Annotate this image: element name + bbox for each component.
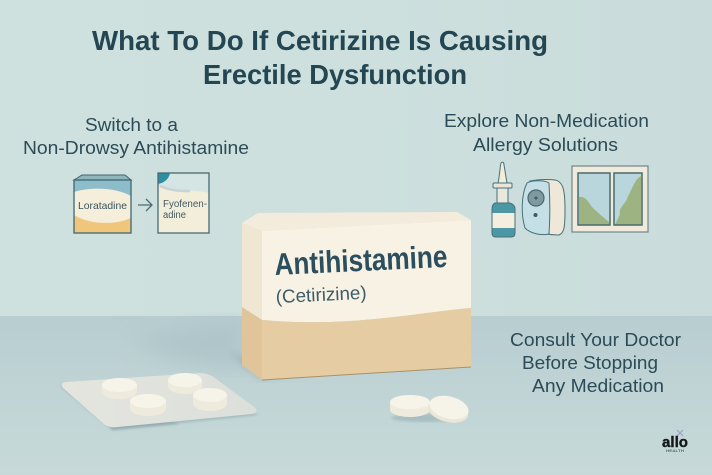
heading: switch to a non-drowsy antihistamine: Non-Drowsy Antihistamine bbox=[23, 137, 249, 158]
heading: explore non-medication allergy solutions: Allergy Solutions bbox=[473, 134, 618, 155]
box label: antihistamine: Antihistamine bbox=[274, 239, 448, 282]
title bbox=[92, 25, 548, 90]
logo: allo health: allo bbox=[662, 435, 688, 451]
antihistamine box bbox=[230, 212, 471, 380]
icon: fexofenadine box: adine bbox=[163, 210, 186, 221]
blister pack with tablets bbox=[60, 373, 258, 430]
tablet 1 bbox=[102, 378, 137, 399]
loose tablets bbox=[390, 392, 471, 427]
heading: switch to a non-drowsy antihistamine: Switch to a bbox=[85, 114, 179, 135]
heading: explore non-medication allergy solutions: Explore Non-Medication bbox=[444, 110, 649, 131]
logo: allo health: HEALTH bbox=[666, 449, 685, 453]
logo: allo health bbox=[662, 430, 688, 453]
box label: cetirizine: (Cetirizine) bbox=[275, 282, 367, 307]
heading: explore non-medication allergy solutions bbox=[444, 110, 649, 155]
heading: switch to a non-drowsy antihistamine bbox=[23, 114, 249, 158]
icon: window bbox=[572, 166, 648, 232]
tablet 2 bbox=[168, 373, 202, 394]
title: Erectile Dysfunction bbox=[203, 59, 467, 90]
icon: nasal spray bbox=[492, 162, 515, 237]
heading: consult your doctor: Consult Your Doctor bbox=[510, 329, 681, 350]
heading: consult your doctor: Any Medication bbox=[532, 375, 664, 396]
icon: loratadine box bbox=[74, 175, 131, 233]
tablet 3 bbox=[130, 394, 166, 416]
icon: fexofenadine box bbox=[158, 173, 209, 233]
icon: air purifier bbox=[522, 180, 565, 235]
heading: consult your doctor: Before Stopping bbox=[522, 352, 658, 373]
heading: consult your doctor bbox=[510, 329, 681, 396]
icon: fexofenadine box: Fyofenen- bbox=[163, 199, 207, 210]
arrow bbox=[138, 199, 152, 211]
icon: loratadine box: Loratadine bbox=[78, 200, 127, 212]
tablet 4 bbox=[193, 388, 227, 411]
title: What To Do If Cetirizine Is Causing bbox=[92, 25, 548, 56]
